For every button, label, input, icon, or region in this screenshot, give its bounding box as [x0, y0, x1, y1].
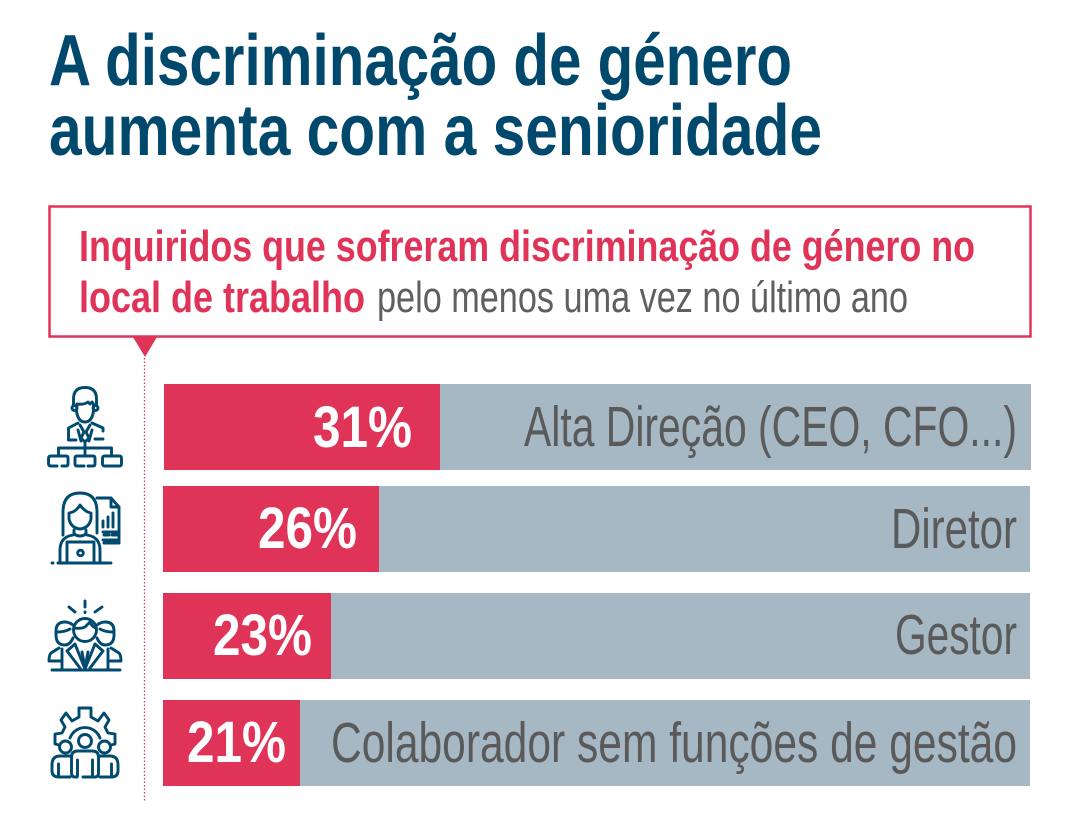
title: [49, 21, 822, 171]
bar: Gestor 23%: [163, 593, 1030, 679]
bar: Diretor 26%: [163, 486, 1030, 572]
icon: gear with staff group: [52, 708, 118, 777]
callout box: pelo menos uma vez no último ano: [377, 273, 908, 322]
callout box: local de trabalho: [79, 273, 365, 322]
icon: executive with org chart: [48, 388, 122, 466]
bar: Colaborador 21%: [163, 700, 1030, 786]
bar: Gestor 23%: 23%: [213, 603, 312, 668]
title: A discriminação de género: [49, 21, 792, 101]
bar: Diretor 26%: 26%: [258, 496, 357, 561]
bar: Alta Direção 31%: 31%: [313, 395, 412, 460]
bar: Gestor 23%: Gestor: [895, 603, 1017, 667]
icon: management team: [49, 601, 121, 670]
bar: Diretor 26%: Diretor: [891, 497, 1017, 561]
bar: Alta Direção 31%: [164, 384, 1031, 470]
title: aumenta com a senioridade: [49, 91, 822, 171]
icon: woman with laptop and report: [52, 493, 119, 563]
bar: Colaborador 21%: 21%: [187, 710, 286, 775]
callout box: [50, 206, 1030, 357]
